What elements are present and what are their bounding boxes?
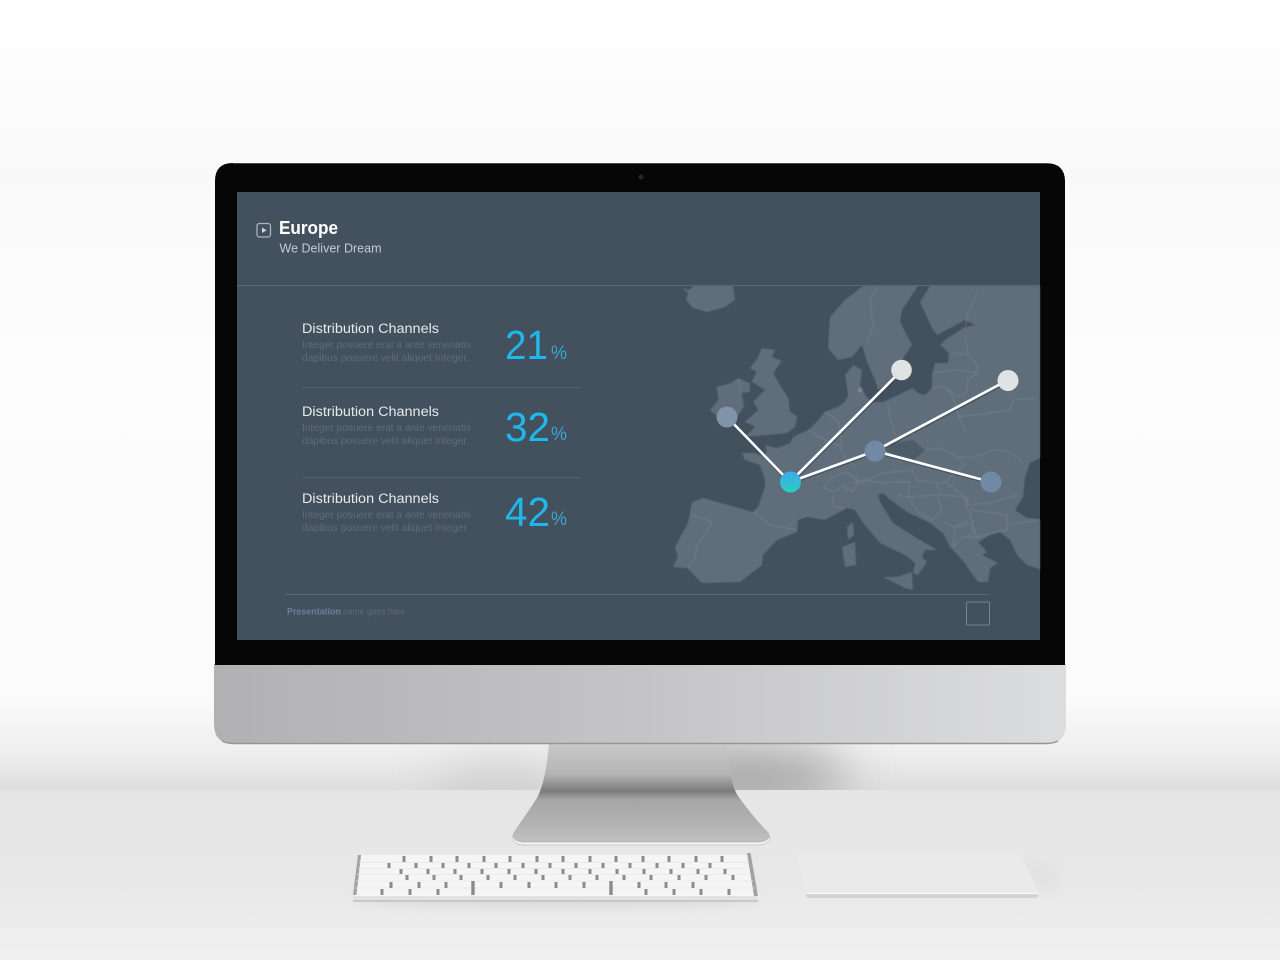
webcam [638, 174, 644, 180]
background: wall and desk [0, 714, 1280, 960]
Iceland [682, 286, 735, 312]
item 2: 32 [505, 404, 550, 450]
item 1: % [551, 343, 567, 364]
item 2: Distribution Channels [302, 404, 439, 419]
item 3: % [551, 509, 567, 530]
Sicily [883, 572, 913, 590]
landmasses [673, 286, 1040, 590]
item 3: Distribution Channels [302, 491, 439, 506]
map node: Sweden [891, 360, 912, 380]
monitor body [214, 162, 1066, 744]
title: Europe [279, 218, 338, 238]
Czech Republic darker [885, 440, 925, 460]
item 3 [302, 489, 567, 535]
Scandinavia [828, 286, 918, 390]
map node: Romania [980, 472, 1002, 492]
icon: play button [257, 224, 270, 237]
logo placeholder square [966, 602, 990, 625]
item 2: % [551, 424, 567, 445]
footer line [285, 594, 990, 595]
keys gaps [382, 856, 733, 895]
map node: Germany [864, 440, 886, 462]
trackpad [797, 853, 1055, 898]
Sardinia [842, 542, 856, 567]
subtitle: We Deliver Dream [280, 240, 382, 256]
item 1: dapibus posuere velit aliquet Integer. [302, 352, 469, 364]
map of Europe [673, 286, 1040, 590]
item 1: Distribution Channels [302, 321, 439, 336]
item 2: Integer posuere erat a ante venenatis [302, 422, 471, 434]
map node: France (hub) [780, 472, 801, 492]
item 3: dapibus posuere velit aliquet Integer. [302, 522, 469, 534]
Denmark islands [858, 388, 862, 392]
item 2 [302, 404, 567, 450]
divider [303, 477, 580, 478]
map node: Ireland [716, 406, 738, 428]
Corsica [847, 522, 854, 540]
divider [303, 387, 580, 388]
item 3: Integer posuere erat a ante venenatis [302, 509, 471, 521]
item 1: Integer posuere erat a ante venenatis [302, 339, 471, 351]
monitor stand [513, 743, 770, 845]
screen: slide [237, 192, 1040, 640]
footer text: Presentationname goes here [287, 606, 405, 616]
item 2: dapibus posuere velit aliquet Integer. [302, 435, 469, 447]
Great Britain [745, 348, 797, 437]
item 1 [302, 321, 567, 368]
Continental Europe [673, 286, 1040, 583]
map node: Belarus [998, 370, 1018, 391]
item 1: 21 [505, 322, 548, 368]
item 3: 42 [505, 489, 550, 535]
country borders [688, 288, 1037, 568]
keyboard [351, 853, 761, 904]
Ireland [710, 378, 750, 422]
connection lines [727, 370, 1008, 483]
